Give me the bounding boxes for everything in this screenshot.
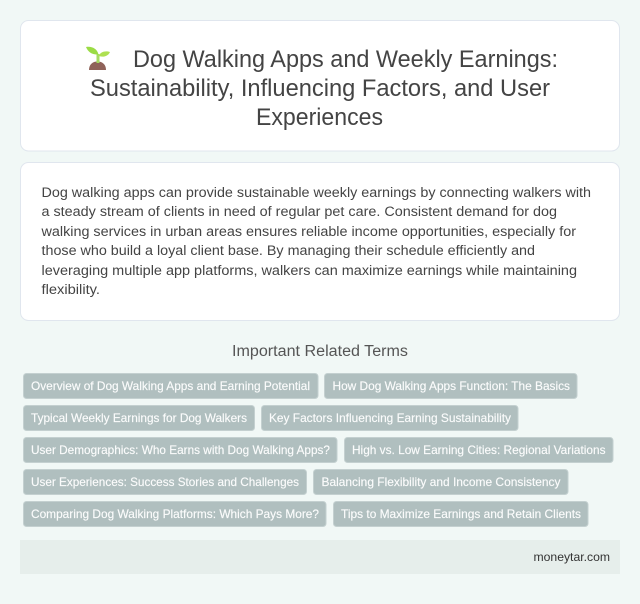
- tag: Comparing Dog Walking Platforms: Which Pays More?: [31, 507, 319, 521]
- body text: leveraging multiple app platforms, walkers can maximize earnings while maintaining: [42, 263, 577, 279]
- tag: [24, 470, 306, 494]
- icon: sprout: [86, 47, 110, 70]
- tag: [24, 374, 318, 398]
- heading text: Sustainability, Influencing Factors, and User: [90, 75, 550, 102]
- tag: [24, 406, 254, 430]
- related terms tags: [24, 374, 613, 526]
- tag: [344, 438, 613, 462]
- body text: a steady stream of clients in need of regular pet care. Consistent demand for dog: [42, 204, 557, 220]
- tag: [324, 374, 577, 398]
- tag: Typical Weekly Earnings for Dog Walkers: [31, 411, 247, 425]
- panel: title: [20, 20, 620, 151]
- panel: description: [20, 162, 620, 320]
- tag: [334, 502, 588, 526]
- body text: flexibility.: [42, 282, 100, 298]
- tag: [24, 502, 326, 526]
- tag: User Demographics: Who Earns with Dog Walking Apps?: [31, 443, 330, 457]
- tag: How Dog Walking Apps Function: The Basics: [332, 379, 570, 393]
- heading text: [90, 46, 558, 131]
- body text: Dog walking apps can provide sustainable weekly earnings by connecting walkers with: [42, 185, 591, 201]
- body text: [40, 185, 591, 298]
- footer source text: moneytar.com: [534, 550, 610, 564]
- body text: those who build a loyal client base. By managing their schedule efficiently and: [42, 243, 535, 259]
- tag: Balancing Flexibility and Income Consistency: [322, 475, 560, 489]
- tag: [314, 470, 568, 494]
- tag: [24, 438, 337, 462]
- heading text: Dog Walking Apps and Weekly Earnings:: [133, 46, 558, 73]
- tag: [262, 406, 518, 430]
- heading text: Experiences: [256, 104, 383, 131]
- tag: High vs. Low Earning Cities: Regional Variations: [352, 443, 606, 457]
- section heading: Important Related Terms: [232, 343, 408, 360]
- tag: Key Factors Influencing Earning Sustainability: [269, 411, 511, 425]
- tag: User Experiences: Success Stories and Challenges: [31, 475, 299, 489]
- tag: Overview of Dog Walking Apps and Earning Potential: [31, 379, 310, 393]
- footer: [20, 540, 620, 574]
- body text: walking services in urban areas ensures reliable income opportunities, especially for: [40, 224, 576, 240]
- tag: Tips to Maximize Earnings and Retain Clients: [341, 507, 581, 521]
